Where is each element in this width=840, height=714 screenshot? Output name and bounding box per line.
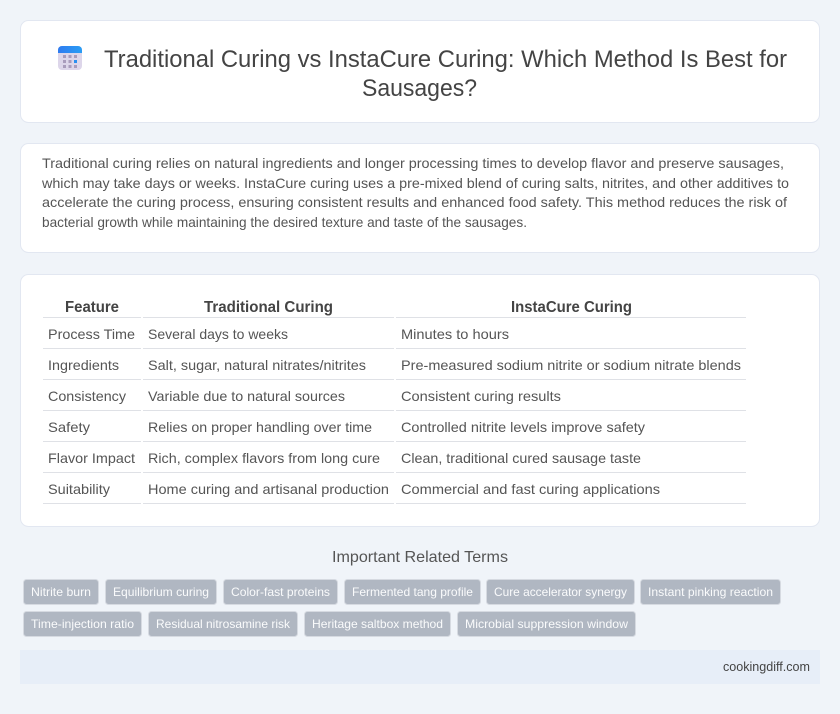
tags: related terms: Residual nitrosamine risk (156, 617, 291, 631)
tags: related terms: Instant pinking reaction (648, 585, 773, 599)
panel: introduction text: accelerate the curing process, ensuring consistent results and enhanced food safety. This method reduces the risk of (42, 194, 787, 210)
table header row: InstaCure Curing (511, 299, 632, 316)
row: safety: Safety (48, 419, 90, 435)
table header row (65, 299, 632, 316)
tags: related terms: Microbial suppression window (465, 617, 628, 631)
row: ingredients: Salt, sugar, natural nitrates/nitrites (148, 357, 366, 373)
tags: related terms: Cure accelerator synergy (494, 585, 627, 599)
footer: cookingdiff.com (723, 659, 810, 674)
icon: calendar (58, 46, 82, 70)
row: process time: Process Time (48, 326, 135, 342)
tags: related terms: Fermented tang profile (352, 585, 473, 599)
panel: comparison table (20, 274, 820, 526)
tags: related terms: Nitrite burn (31, 585, 91, 599)
header panel (20, 20, 820, 122)
row: safety: Controlled nitrite levels improve safety (401, 419, 645, 435)
row: consistency: Variable due to natural sources (148, 388, 345, 404)
row: process time (48, 326, 509, 342)
row: suitability: Suitability (48, 481, 110, 497)
row: suitability (48, 481, 660, 497)
row: process time: Minutes to hours (401, 326, 509, 342)
tags: related terms: Time-injection ratio (31, 617, 134, 631)
panel: introduction text: bacterial growth while maintaining the desired texture and taste of the sausages. (42, 214, 527, 230)
table header row: Feature (65, 299, 119, 316)
panel: introduction text: which may take days or weeks. InstaCure curing uses a pre-mixed blend of curing salts, nitrites, and other additives to (41, 175, 789, 191)
tags: related terms: Color-fast proteins (231, 585, 330, 599)
heading: related terms: Important Related Terms (332, 549, 508, 566)
title: Sausages? (362, 75, 477, 102)
row: flavor impact: Rich, complex flavors from long cure (148, 450, 380, 466)
footer (20, 650, 820, 684)
row: safety (48, 419, 645, 435)
row: safety: Relies on proper handling over time (148, 419, 372, 435)
panel: introduction text (20, 144, 820, 252)
row: consistency: Consistency (48, 388, 126, 404)
row: ingredients: Ingredients (48, 357, 119, 373)
row: flavor impact (48, 450, 641, 466)
title (104, 46, 787, 102)
tags: related terms (24, 580, 780, 636)
row: ingredients: Pre-measured sodium nitrite or sodium nitrate blends (401, 357, 741, 373)
row: flavor impact: Flavor Impact (48, 450, 135, 466)
row: suitability: Home curing and artisanal production (148, 481, 389, 497)
tags: related terms: Heritage saltbox method (312, 617, 443, 631)
tags: related terms: Equilibrium curing (113, 585, 209, 599)
row: process time: Several days to weeks (148, 326, 288, 342)
row: flavor impact: Clean, traditional cured sausage taste (401, 450, 641, 466)
title: Traditional Curing vs InstaCure Curing: Which Method Is Best for (104, 46, 787, 73)
table header row: Traditional Curing (204, 299, 333, 316)
row: ingredients (48, 357, 741, 373)
panel: introduction text: Traditional curing relies on natural ingredients and longer processing times to develop flavor and preserve sausages, (42, 155, 784, 171)
row: consistency: Consistent curing results (401, 388, 561, 404)
row: consistency (48, 388, 561, 404)
row: suitability: Commercial and fast curing applications (401, 481, 660, 497)
